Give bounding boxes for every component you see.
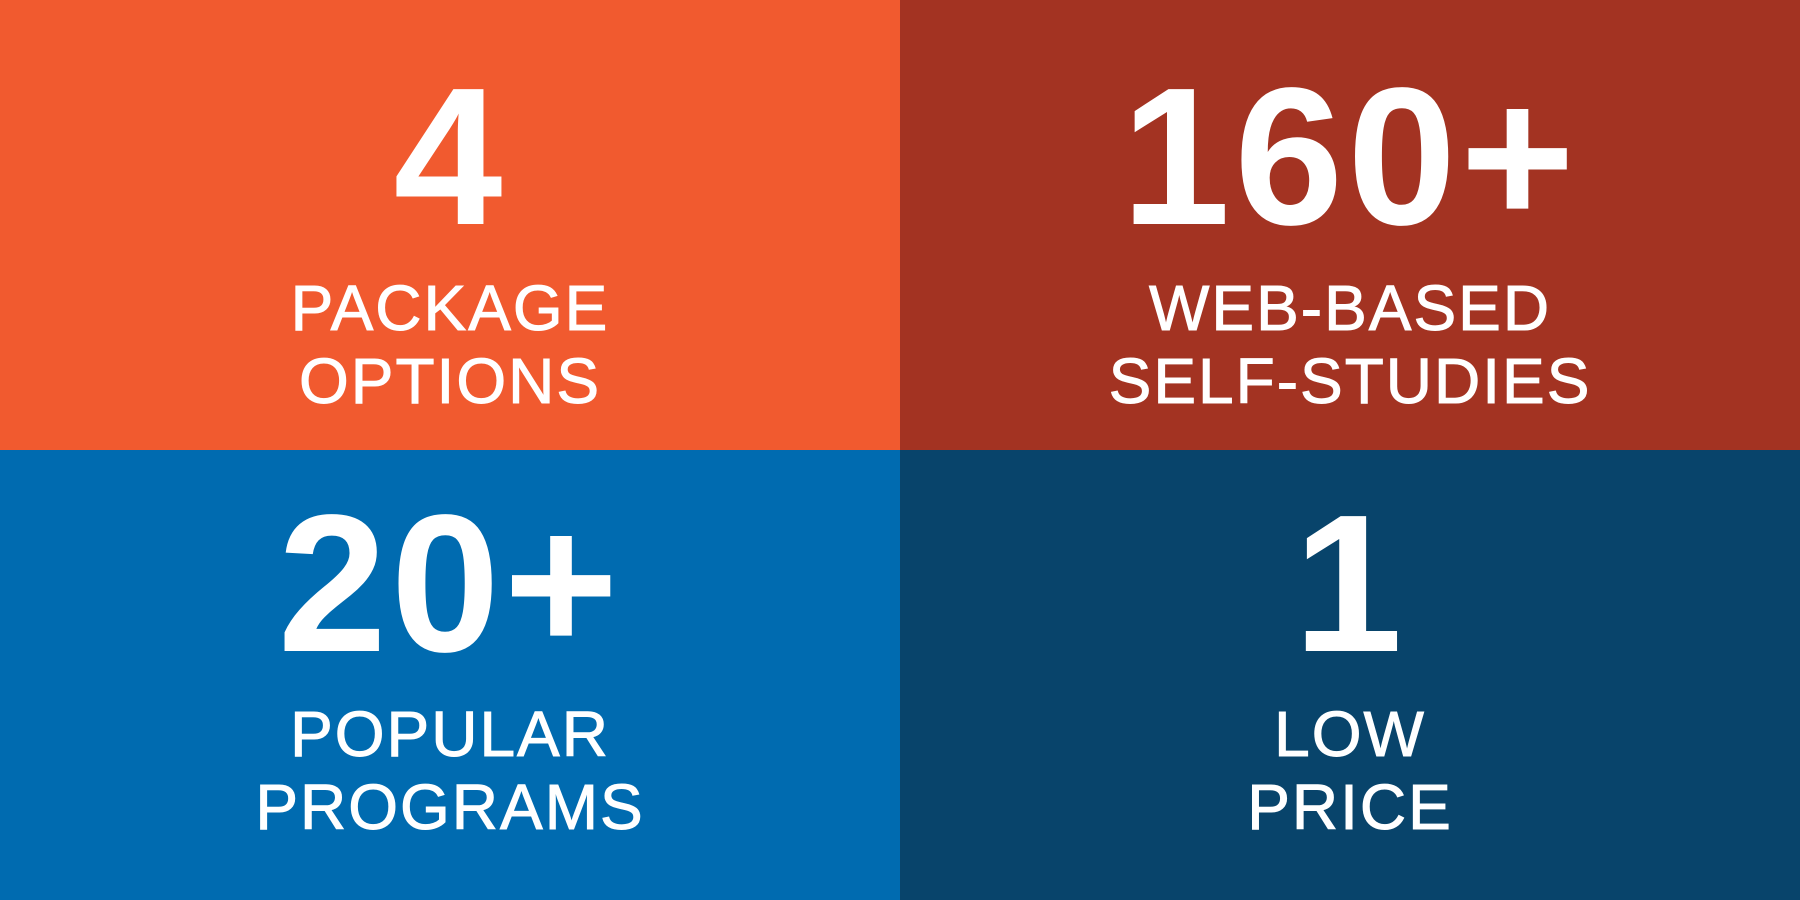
label: web-based self-studies xyxy=(1109,272,1591,417)
label: popular programs: POPULAR xyxy=(290,698,610,770)
label: package options xyxy=(291,272,609,417)
label: low price: PRICE xyxy=(1247,771,1453,843)
panel: low price xyxy=(900,450,1800,900)
label: low price: LOW xyxy=(1274,698,1426,770)
label: low price xyxy=(1247,698,1453,843)
label: popular programs xyxy=(255,698,645,843)
number: 160+: 160+ xyxy=(1121,47,1579,266)
label: popular programs: PROGRAMS xyxy=(255,771,645,843)
label: web-based self-studies: WEB-BASED xyxy=(1149,272,1551,344)
label: package options: PACKAGE xyxy=(291,272,609,344)
label: web-based self-studies: SELF-STUDIES xyxy=(1109,345,1591,417)
number: 20+: 20+ xyxy=(278,474,622,693)
panel: package options xyxy=(0,0,900,450)
number: 1: 1 xyxy=(1293,474,1406,693)
panel: web-based self-studies xyxy=(900,0,1800,450)
label: package options: OPTIONS xyxy=(299,345,601,417)
number: 4: 4 xyxy=(393,47,506,266)
panel: popular programs xyxy=(0,450,900,900)
